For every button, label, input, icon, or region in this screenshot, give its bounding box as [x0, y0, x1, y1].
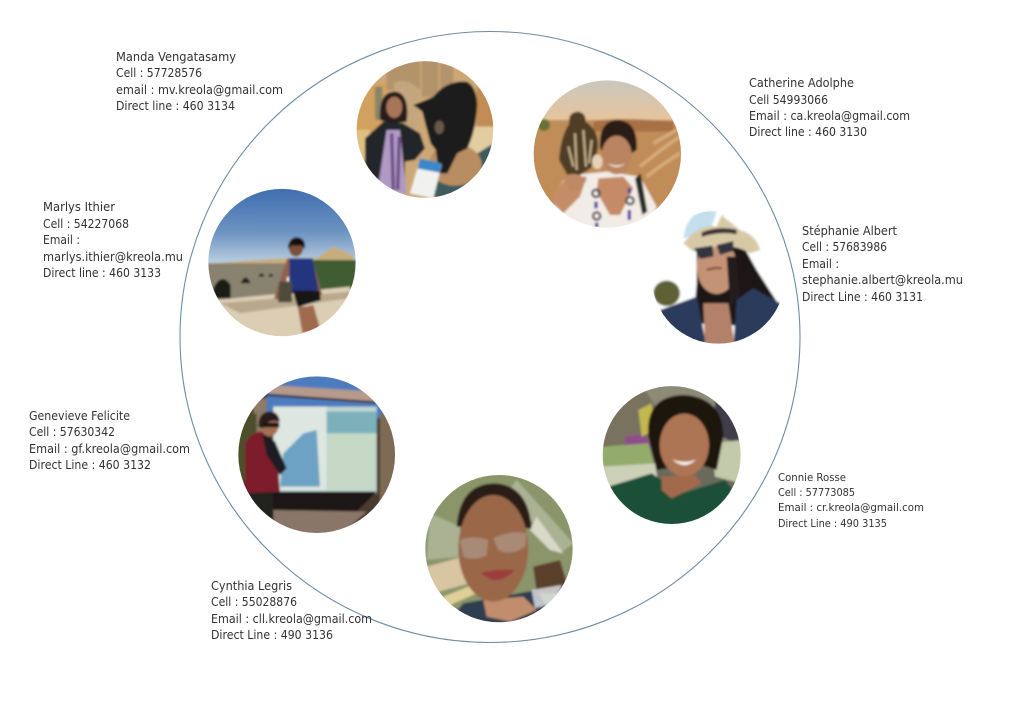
contact: Marlys Ithier — [43, 200, 183, 280]
photo: Genevieve at information board — [237, 375, 397, 537]
contact: Stéphanie Albert: Cell : 57683986 — [802, 240, 887, 254]
photo: Stéphanie with hat — [652, 208, 785, 348]
photo: Manda with bear — [356, 61, 494, 198]
photo: Marlys on the bridge — [207, 187, 360, 340]
contact: Cynthia Legris: Direct Line : 490 3136 — [211, 628, 333, 642]
contact: Genevieve Felicite: Direct Line : 460 3132 — [29, 458, 151, 472]
contact: Genevieve Felicite: Email : gf.kreola@gmail.com — [29, 442, 190, 456]
contact: Cynthia Legris — [211, 579, 372, 642]
contact: Stéphanie Albert — [802, 224, 963, 304]
contact: Manda Vengatasamy: Cell : 57728576 — [116, 66, 202, 80]
contact: Cynthia Legris: Email : cll.kreola@gmail.com — [211, 612, 372, 626]
contact: Stéphanie Albert: Email : — [802, 257, 839, 271]
contact: Manda Vengatasamy: email : mv.kreola@gmail.com — [116, 83, 283, 97]
photo: Cynthia portrait — [423, 473, 575, 625]
contact: Manda Vengatasamy: Manda Vengatasamy — [116, 50, 236, 64]
contact: Catherine Adolphe: Direct line : 460 3130 — [749, 125, 867, 139]
contact: Genevieve Felicite: Genevieve Felicite — [29, 409, 130, 423]
photo: Connie portrait — [602, 386, 741, 524]
contact: Marlys Ithier: Email : — [43, 233, 80, 247]
contact: Stéphanie Albert: Stéphanie Albert — [802, 224, 897, 238]
contact: Connie Rosse — [778, 471, 924, 530]
photo: Catherine with falcon — [534, 80, 681, 228]
contact: Connie Rosse: Cell : 57773085 — [778, 486, 855, 499]
contact: Marlys Ithier: marlys.ithier@kreola.mu — [43, 250, 183, 264]
contact: Catherine Adolphe: Cell 54993066 — [749, 93, 828, 107]
contact: Cynthia Legris: Cell : 55028876 — [211, 595, 297, 609]
contact: Genevieve Felicite — [29, 409, 190, 472]
contact: Connie Rosse: Email : cr.kreola@gmail.com — [778, 501, 924, 514]
contact: Manda Vengatasamy — [116, 50, 283, 113]
contact: Manda Vengatasamy: Direct line : 460 3134 — [116, 99, 235, 113]
contact: Connie Rosse: Connie Rosse — [778, 471, 846, 484]
contact: Connie Rosse: Direct Line : 490 3135 — [778, 517, 887, 530]
contact: Marlys Ithier: Cell : 54227068 — [43, 217, 129, 231]
contact: Stéphanie Albert: Direct Line : 460 3131 — [802, 290, 923, 304]
contact: Genevieve Felicite: Cell : 57630342 — [29, 425, 115, 439]
contact: Marlys Ithier: Direct line : 460 3133 — [43, 266, 161, 280]
contact: Cynthia Legris: Cynthia Legris — [211, 579, 292, 593]
contact: Marlys Ithier: Marlys Ithier — [43, 200, 115, 214]
contact: Catherine Adolphe: Email : ca.kreola@gmail.com — [749, 109, 910, 123]
large ring — [180, 32, 800, 642]
contact: Stéphanie Albert: stephanie.albert@kreola.mu — [802, 273, 963, 287]
contact: Catherine Adolphe — [749, 76, 910, 139]
contact: Catherine Adolphe: Catherine Adolphe — [749, 76, 854, 90]
